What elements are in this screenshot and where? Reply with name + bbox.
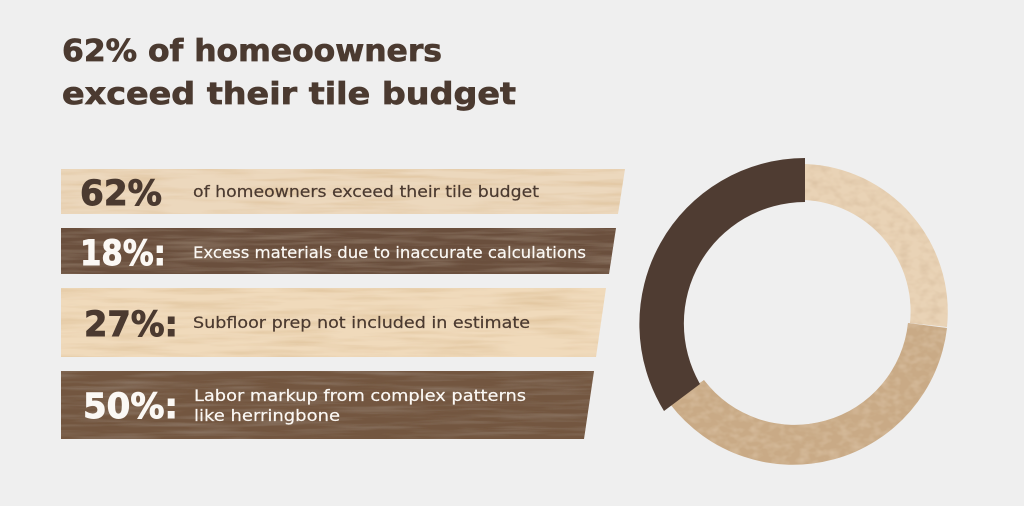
text: 50% description: Labor markup from complex patterns [194,386,526,405]
panel: 50% stat bar [61,371,594,439]
number: 50%: 50%: [83,387,178,427]
text: 18% description: Excess materials due to inaccurate calculations [193,243,586,262]
text: 50% description: like herringbone [194,406,340,425]
title [62,34,516,112]
text: 62% description: of homeowners exceed their tile budget [193,182,539,201]
bar: dark wood 2 [61,228,616,274]
number: 62%: 62% [80,174,162,214]
number: 27%: 27%: [84,305,178,345]
number: 18%: 18%: [80,234,166,274]
title: exceed their tile budget [62,77,516,112]
text: 27% description: Subfloor prep not included in estimate [193,313,530,332]
panel: 62% stat bar [61,169,625,214]
bar: light wood 1 [61,169,625,214]
donut chart [639,158,948,465]
panel: 27% stat bar [61,288,606,357]
segment: dark brown [639,158,805,411]
text: 50% description [194,386,526,425]
bar: dark wood 4 [61,371,594,439]
segment: tan wood [670,323,947,465]
panel: 18% stat bar [61,228,616,274]
title: 62% of homeoowners [62,34,442,69]
bar: light wood 3 [61,288,606,357]
segment: light wood [805,164,948,327]
